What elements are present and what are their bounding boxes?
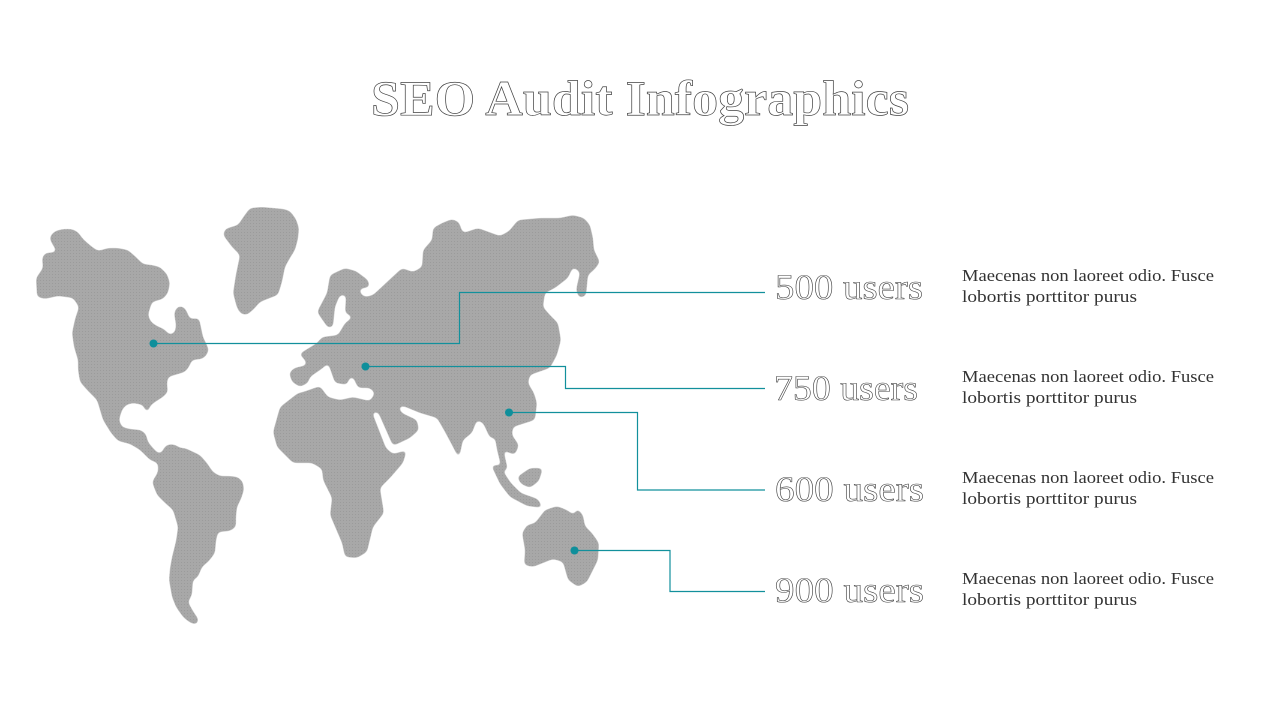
map: North America xyxy=(36,229,209,464)
title: SEO Audit Infographics xyxy=(371,70,909,126)
stat: 600 users: 600 users xyxy=(775,469,924,509)
marker: Europe xyxy=(362,362,370,370)
marker: Asia xyxy=(505,408,513,416)
map: Indonesia xyxy=(491,465,543,508)
description: 900 users: Maecenas non laoreet odio. Fusce xyxy=(962,569,1214,588)
description: 600 users xyxy=(962,468,1214,508)
connector: 500 users xyxy=(150,292,765,348)
connector: 900 users xyxy=(570,546,765,592)
map: South America xyxy=(152,444,244,625)
description: 900 users: lobortis porttitor purus xyxy=(962,590,1137,609)
description: 500 users xyxy=(962,266,1214,306)
description: 750 users xyxy=(962,367,1214,407)
stat: 900 users: 900 users xyxy=(775,570,924,610)
map: Greenland xyxy=(223,207,299,315)
description: 750 users: Maecenas non laoreet odio. Fusce xyxy=(962,367,1214,386)
map: Eurasia and Africa xyxy=(273,215,600,558)
connector: 750 users xyxy=(362,362,765,388)
description: 900 users xyxy=(962,569,1214,609)
stat: 750 users: 750 users xyxy=(774,368,918,408)
description: 750 users: lobortis porttitor purus xyxy=(962,388,1137,407)
marker: Australia xyxy=(570,546,578,554)
description: 600 users: lobortis porttitor purus xyxy=(962,489,1137,508)
map: New Guinea xyxy=(517,468,543,488)
description: 600 users: Maecenas non laoreet odio. Fusce xyxy=(962,468,1214,487)
marker: North America xyxy=(150,340,158,348)
map: Australia xyxy=(522,506,599,587)
stat: 500 users: 500 users xyxy=(775,267,923,307)
connector: 600 users xyxy=(505,408,765,490)
description: 500 users: Maecenas non laoreet odio. Fusce xyxy=(962,266,1214,285)
world map xyxy=(36,207,600,625)
description: 500 users: lobortis porttitor purus xyxy=(962,287,1137,306)
